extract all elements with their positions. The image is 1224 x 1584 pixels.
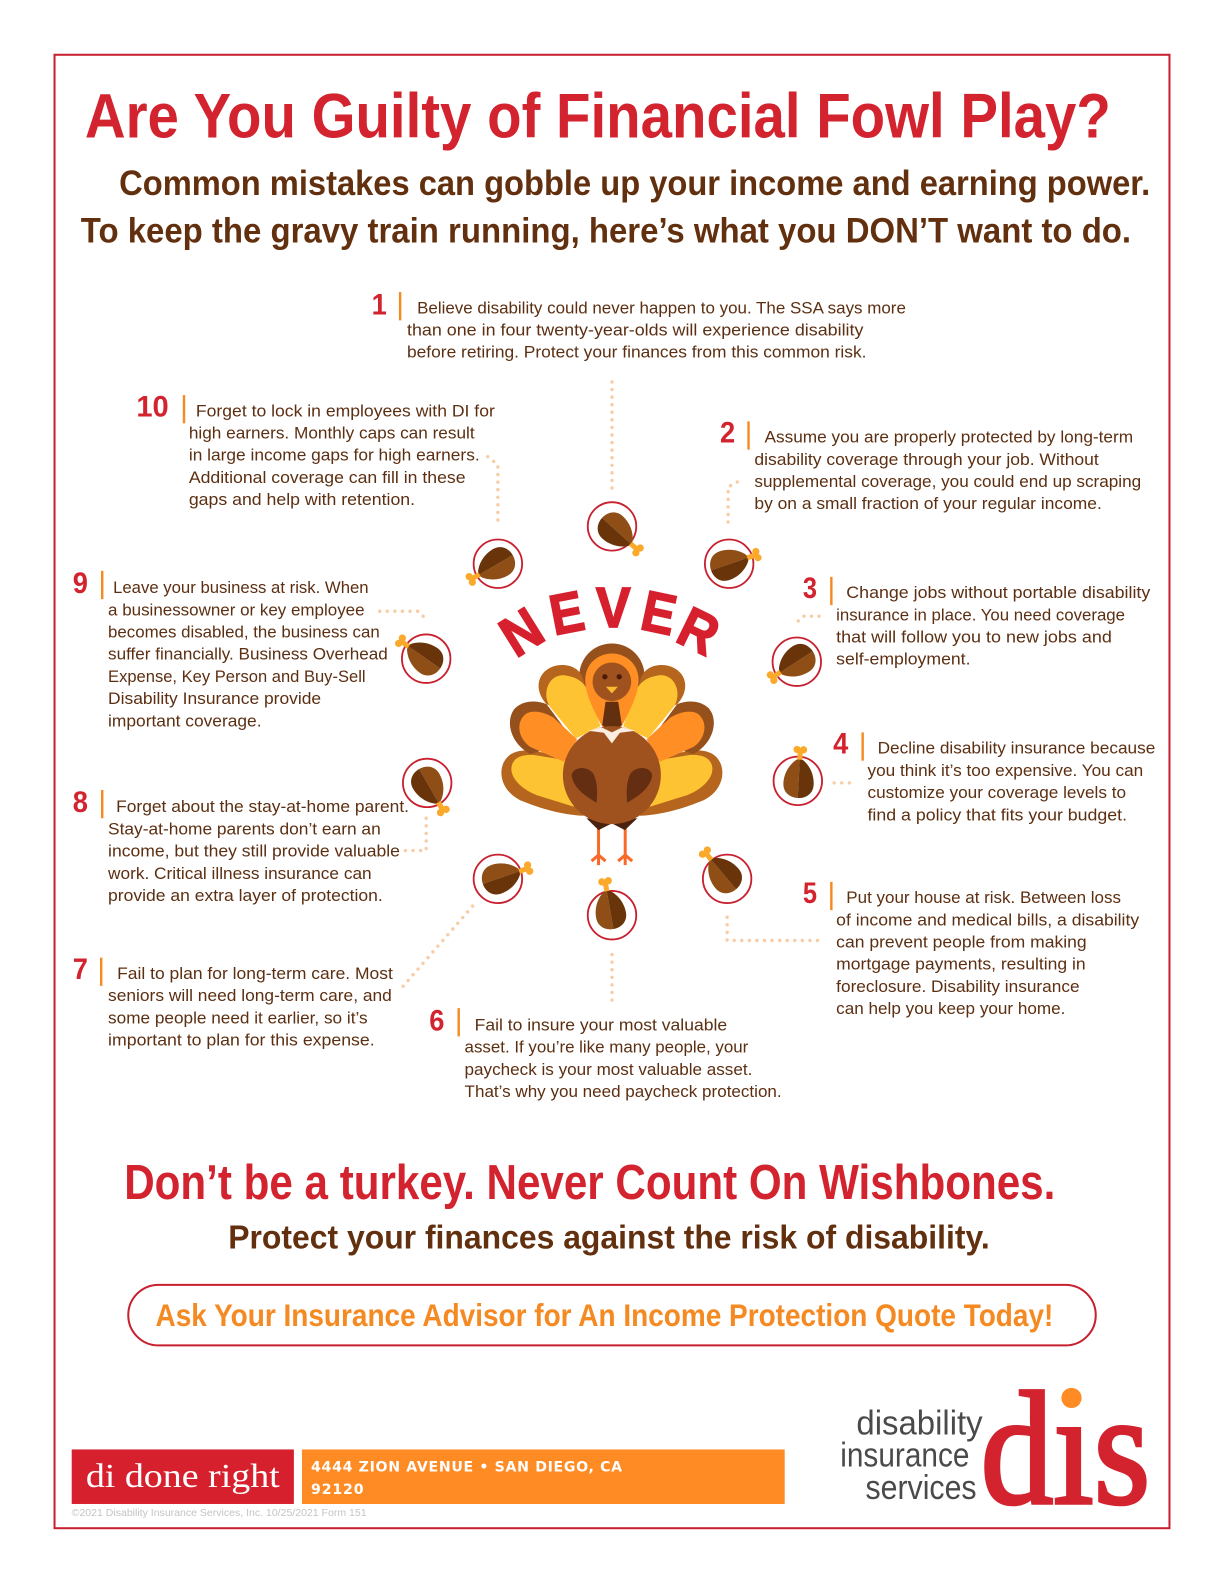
text block: customize your coverage levels to (868, 784, 1126, 802)
closing headline: Don’t be a turkey. Never Count On Wishbones. (124, 1155, 1055, 1210)
text block: Leave your business at risk. When (113, 579, 369, 597)
text block: important to plan for this expense. (108, 1031, 375, 1049)
item 4 (833, 728, 1155, 824)
icon: drumstick 1 (588, 502, 651, 564)
icon: drumstick 9 (389, 626, 450, 683)
number 10: 10 (136, 390, 169, 423)
accent bar (101, 571, 103, 599)
text block: Forget to lock in employees with DI for (196, 402, 496, 420)
accent bar (830, 577, 833, 605)
text block (465, 1016, 782, 1101)
item 9 (73, 567, 388, 730)
text block: by on a small fraction of your regular income. (754, 495, 1102, 513)
number 2: 2 (720, 417, 735, 450)
text block: Fail to insure your most valuable (475, 1016, 727, 1034)
text block: seniors will need long-term care, and (108, 987, 392, 1005)
text block (836, 889, 1140, 1018)
item 10 (136, 390, 496, 509)
text block: find a policy that fits your budget. (868, 806, 1127, 824)
text block: supplemental coverage, you could end up scraping (754, 473, 1141, 491)
accent bar (830, 882, 833, 910)
text block (108, 579, 388, 730)
text block: can prevent people from making (836, 934, 1087, 952)
turkey illustration with NEVER (489, 576, 729, 865)
logo letters: dis (981, 1359, 1150, 1538)
logo wordmark: insurance (840, 1437, 970, 1475)
dotted connectors (380, 382, 853, 1002)
text block (189, 402, 496, 509)
company logo (840, 1359, 1150, 1538)
text block: Decline disability insurance because (878, 740, 1155, 758)
text block (107, 798, 409, 905)
accent bar (100, 958, 102, 986)
text block (108, 965, 393, 1049)
NEVER arc heading (489, 576, 729, 669)
item 5 (803, 877, 1140, 1018)
icon: drumstick 2 (705, 539, 765, 588)
text block: high earners. Monthly caps can result (189, 425, 475, 443)
text block (754, 429, 1141, 513)
icon: drumstick 6 (588, 875, 636, 939)
accent bar (457, 1008, 460, 1036)
turkey (501, 643, 722, 865)
address bar (302, 1449, 785, 1504)
NEVER arc heading: N (489, 595, 554, 669)
text block: mortgage payments, resulting in (836, 956, 1086, 974)
text block: foreclosure. Disability insurance (836, 978, 1080, 996)
text block (407, 299, 906, 362)
subtitle: To keep the gravy train running, here’s what you DON’T want to do. (81, 212, 1131, 251)
text block: Change jobs without portable disability (846, 584, 1151, 602)
accent bar (101, 790, 103, 818)
number 9: 9 (73, 567, 88, 600)
NEVER arc heading: V (596, 576, 631, 639)
text block: that will follow you to new jobs and (836, 629, 1112, 647)
number 6: 6 (429, 1004, 444, 1037)
number 8: 8 (73, 786, 88, 819)
accent bar (399, 292, 401, 320)
text block: gaps and help with retention. (189, 491, 415, 509)
icon: drumstick 3 (761, 637, 821, 692)
text block: in large income gaps for high earners. (189, 447, 480, 465)
text block: paycheck is your most valuable asset. (465, 1061, 752, 1079)
text block: work. Critical illness insurance can (107, 865, 372, 883)
text block: asset. If you’re like many people, your (465, 1039, 749, 1057)
text block: becomes disabled, the business can (108, 623, 380, 641)
text block: Assume you are properly protected by long-term (764, 429, 1133, 447)
text block: Stay-at-home parents don’t earn an (108, 820, 381, 838)
item 3 (803, 572, 1151, 669)
text block: Put your house at risk. Between loss (846, 889, 1121, 907)
tagline badge (72, 1449, 294, 1504)
text block: than one in four twenty-year-olds will experience disability (407, 322, 864, 340)
item 1 (372, 288, 906, 362)
item 2 (720, 417, 1141, 513)
text block: important coverage. (108, 712, 262, 730)
address bar: 92120 (311, 1482, 364, 1498)
logo dot mask (1059, 1387, 1088, 1417)
call to action pill (128, 1285, 1096, 1345)
call to action pill: Ask Your Insurance Advisor for An Income Protection Quote Today! (156, 1298, 1053, 1333)
text block: self-employment. (836, 651, 971, 669)
logo dot (1061, 1388, 1082, 1408)
text block: Believe disability could never happen to you. The SSA says more (417, 299, 906, 317)
subtitle: Common mistakes can gobble up your income and earning power. (119, 164, 1150, 203)
closing subhead: Protect your finances against the risk of disability. (228, 1219, 990, 1256)
icon: drumstick 5 (691, 840, 751, 903)
icon: drumstick 7 (474, 853, 537, 903)
text block: That’s why you need paycheck protection. (465, 1083, 782, 1101)
text block: you think it’s too expensive. You can (868, 762, 1143, 780)
text block: Expense, Key Person and Buy-Sell (108, 668, 366, 686)
number 5: 5 (803, 877, 817, 910)
icon: drumstick 8 (403, 759, 458, 822)
text block (868, 740, 1155, 824)
item 8 (73, 786, 409, 905)
number 3: 3 (803, 572, 817, 605)
text block: can help you keep your home. (836, 1000, 1065, 1018)
text block: some people need it earlier, so it’s (108, 1009, 368, 1027)
address bar: 4444 ZION AVENUE • SAN DIEGO, CA (311, 1460, 622, 1476)
text block (836, 584, 1151, 669)
text block: of income and medical bills, a disability (836, 911, 1140, 929)
text block: Disability Insurance provide (108, 690, 321, 708)
logo wordmark (840, 1404, 983, 1507)
number 7: 7 (73, 953, 88, 986)
text block: Fail to plan for long-term care. Most (117, 965, 393, 983)
text block: insurance in place. You need coverage (836, 606, 1125, 624)
logo wordmark: disability (856, 1404, 983, 1442)
icon: drumstick 10 (460, 540, 522, 594)
number 1: 1 (372, 288, 387, 321)
logo wordmark: services (865, 1469, 977, 1507)
NEVER arc heading: R (668, 595, 729, 668)
accent bar (747, 421, 750, 450)
subtitle (81, 164, 1150, 251)
item 6 (429, 1004, 782, 1101)
NEVER arc heading: E (545, 580, 589, 648)
number 4: 4 (833, 728, 849, 761)
text block: income, but they still provide valuable (108, 843, 400, 861)
text block: disability coverage through your job. Without (754, 451, 1099, 469)
text block: provide an extra layer of protection. (108, 887, 383, 905)
icon: drumstick 4 (774, 745, 822, 805)
copyright: ©2021 Disability Insurance Services, Inc. 10/25/2021 Form 151 (72, 1508, 367, 1519)
text block: Forget about the stay-at-home parent. (116, 798, 409, 816)
text block: Additional coverage can fill in these (189, 469, 466, 487)
accent bar (183, 395, 185, 423)
title: Are You Guilty of Financial Fowl Play? (85, 82, 1111, 152)
tagline badge: di done right (86, 1457, 280, 1495)
accent bar (861, 732, 864, 761)
text block: before retiring. Protect your finances from this common risk. (407, 344, 866, 362)
text block: suffer financially. Business Overhead (108, 646, 388, 664)
drumstick icons ring (389, 502, 822, 939)
NEVER arc heading: E (636, 580, 682, 648)
item 7 (73, 953, 393, 1049)
text block: a businessowner or key employee (108, 601, 365, 619)
